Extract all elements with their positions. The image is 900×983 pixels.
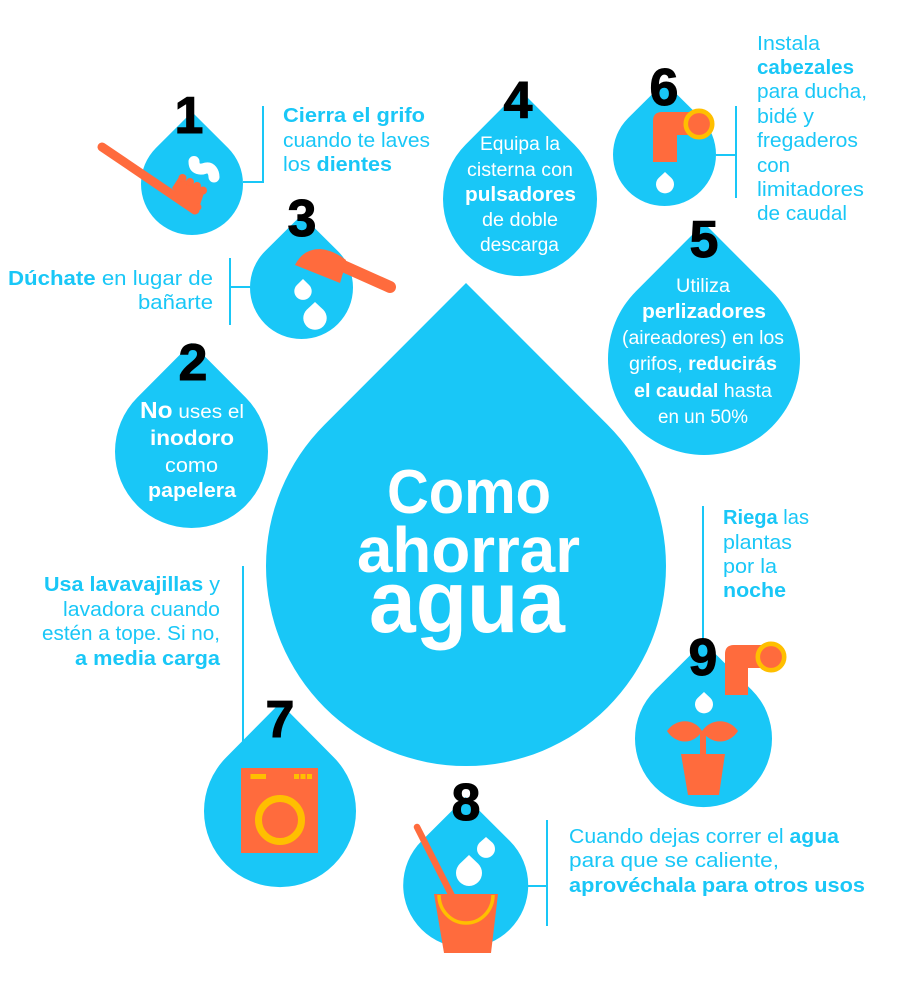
number 7: 7 — [266, 691, 294, 749]
tip 9: water plants at night — [635, 506, 809, 807]
text: para ducha, — [757, 80, 867, 103]
title — [357, 458, 580, 651]
drop — [403, 797, 528, 948]
number 5: 5 — [690, 211, 718, 269]
text: con — [757, 154, 790, 177]
text: para que se caliente, — [569, 849, 779, 872]
text — [8, 267, 213, 314]
text: bidé y — [757, 105, 815, 128]
text: Utiliza — [676, 276, 730, 297]
text: cisterna con — [467, 160, 573, 181]
icon: toothbrush — [102, 147, 207, 214]
text — [465, 134, 576, 256]
text: Usa lavavajillas y — [44, 573, 221, 596]
text: plantas — [723, 531, 792, 554]
text: papelera — [148, 480, 237, 502]
tip 4: cistern — [443, 72, 597, 276]
number 6: 6 — [650, 59, 678, 117]
drop — [613, 82, 716, 206]
text: Riega las — [723, 506, 809, 529]
text: en un 50% — [658, 407, 748, 428]
number 8: 8 — [452, 774, 480, 832]
title: ahorrar — [357, 514, 580, 586]
text: Dúchate en lugar de — [8, 267, 213, 290]
title: agua — [369, 552, 566, 651]
text: pulsadores — [465, 183, 576, 206]
text: por la — [723, 555, 778, 578]
text: Instala — [757, 32, 821, 55]
tip 8: reuse water — [403, 774, 865, 953]
text: perlizadores — [642, 300, 766, 323]
tip 3: shower — [8, 190, 390, 339]
number 2: 2 — [179, 334, 207, 392]
number 1: 1 — [175, 87, 203, 145]
icon: water drop — [656, 172, 674, 193]
text — [757, 32, 867, 225]
text: Equipa la — [480, 134, 560, 155]
central drop with title — [266, 283, 666, 766]
connector — [528, 820, 547, 926]
icon: washing machine — [241, 768, 318, 853]
text: lavadora cuando — [63, 598, 220, 621]
text: descarga — [480, 235, 559, 256]
text: a media carga — [75, 647, 221, 670]
text: fregaderos — [757, 129, 858, 152]
drop — [204, 703, 356, 887]
text — [723, 506, 809, 602]
icon: potted plant — [667, 721, 738, 795]
number 9: 9 — [689, 629, 717, 687]
text: cabezales — [757, 56, 854, 79]
text: noche — [723, 579, 786, 602]
tip 2: toilet — [115, 334, 268, 528]
connector — [242, 566, 244, 742]
connector — [702, 506, 704, 650]
connector — [243, 106, 263, 182]
text: de caudal — [757, 202, 847, 225]
text: como — [165, 455, 218, 477]
text — [140, 397, 244, 502]
text: Cierra el grifo — [283, 104, 425, 127]
text: Cuando dejas correr el agua — [569, 825, 840, 848]
tip 5: aerators — [608, 211, 800, 455]
tip 6: shower limiter — [613, 32, 867, 225]
text — [569, 825, 865, 897]
icon: water drop — [695, 692, 713, 713]
text — [42, 573, 221, 670]
icon: shower head — [295, 249, 390, 287]
drop — [141, 112, 243, 235]
text: de doble — [482, 210, 558, 231]
text: estén a tope. Si no, — [42, 622, 220, 645]
drop — [443, 90, 597, 276]
text: inodoro — [150, 427, 234, 450]
text: cuando te laves — [283, 129, 430, 152]
text: aprovéchala para otros usos — [569, 874, 865, 897]
icon: water drops — [456, 837, 495, 886]
text: grifos, reducirás — [629, 354, 777, 375]
text: el caudal hasta — [634, 381, 772, 402]
tip 7: washing machine — [42, 566, 356, 887]
text — [622, 276, 784, 428]
icon: bucket with mop — [417, 827, 498, 953]
text: bañarte — [138, 291, 213, 314]
tip 1: brush teeth — [102, 87, 430, 235]
icon: water drops — [294, 279, 327, 330]
drop — [250, 215, 353, 339]
text: No uses el — [140, 397, 244, 423]
drop — [635, 642, 772, 807]
connector — [716, 106, 736, 198]
text — [283, 104, 430, 176]
text: (aireadores) en los — [622, 328, 784, 349]
connector — [230, 258, 250, 325]
icon: faucet — [653, 111, 712, 162]
number 4: 4 — [504, 72, 533, 130]
main drop — [266, 283, 666, 766]
number 3: 3 — [288, 190, 316, 248]
drop — [608, 223, 800, 455]
drop — [115, 343, 268, 528]
title: Como — [387, 458, 551, 527]
text: los dientes — [283, 153, 392, 176]
icon: faucet — [725, 644, 784, 695]
text: limitadores — [757, 178, 864, 201]
icon: toothpaste foam — [194, 162, 214, 177]
